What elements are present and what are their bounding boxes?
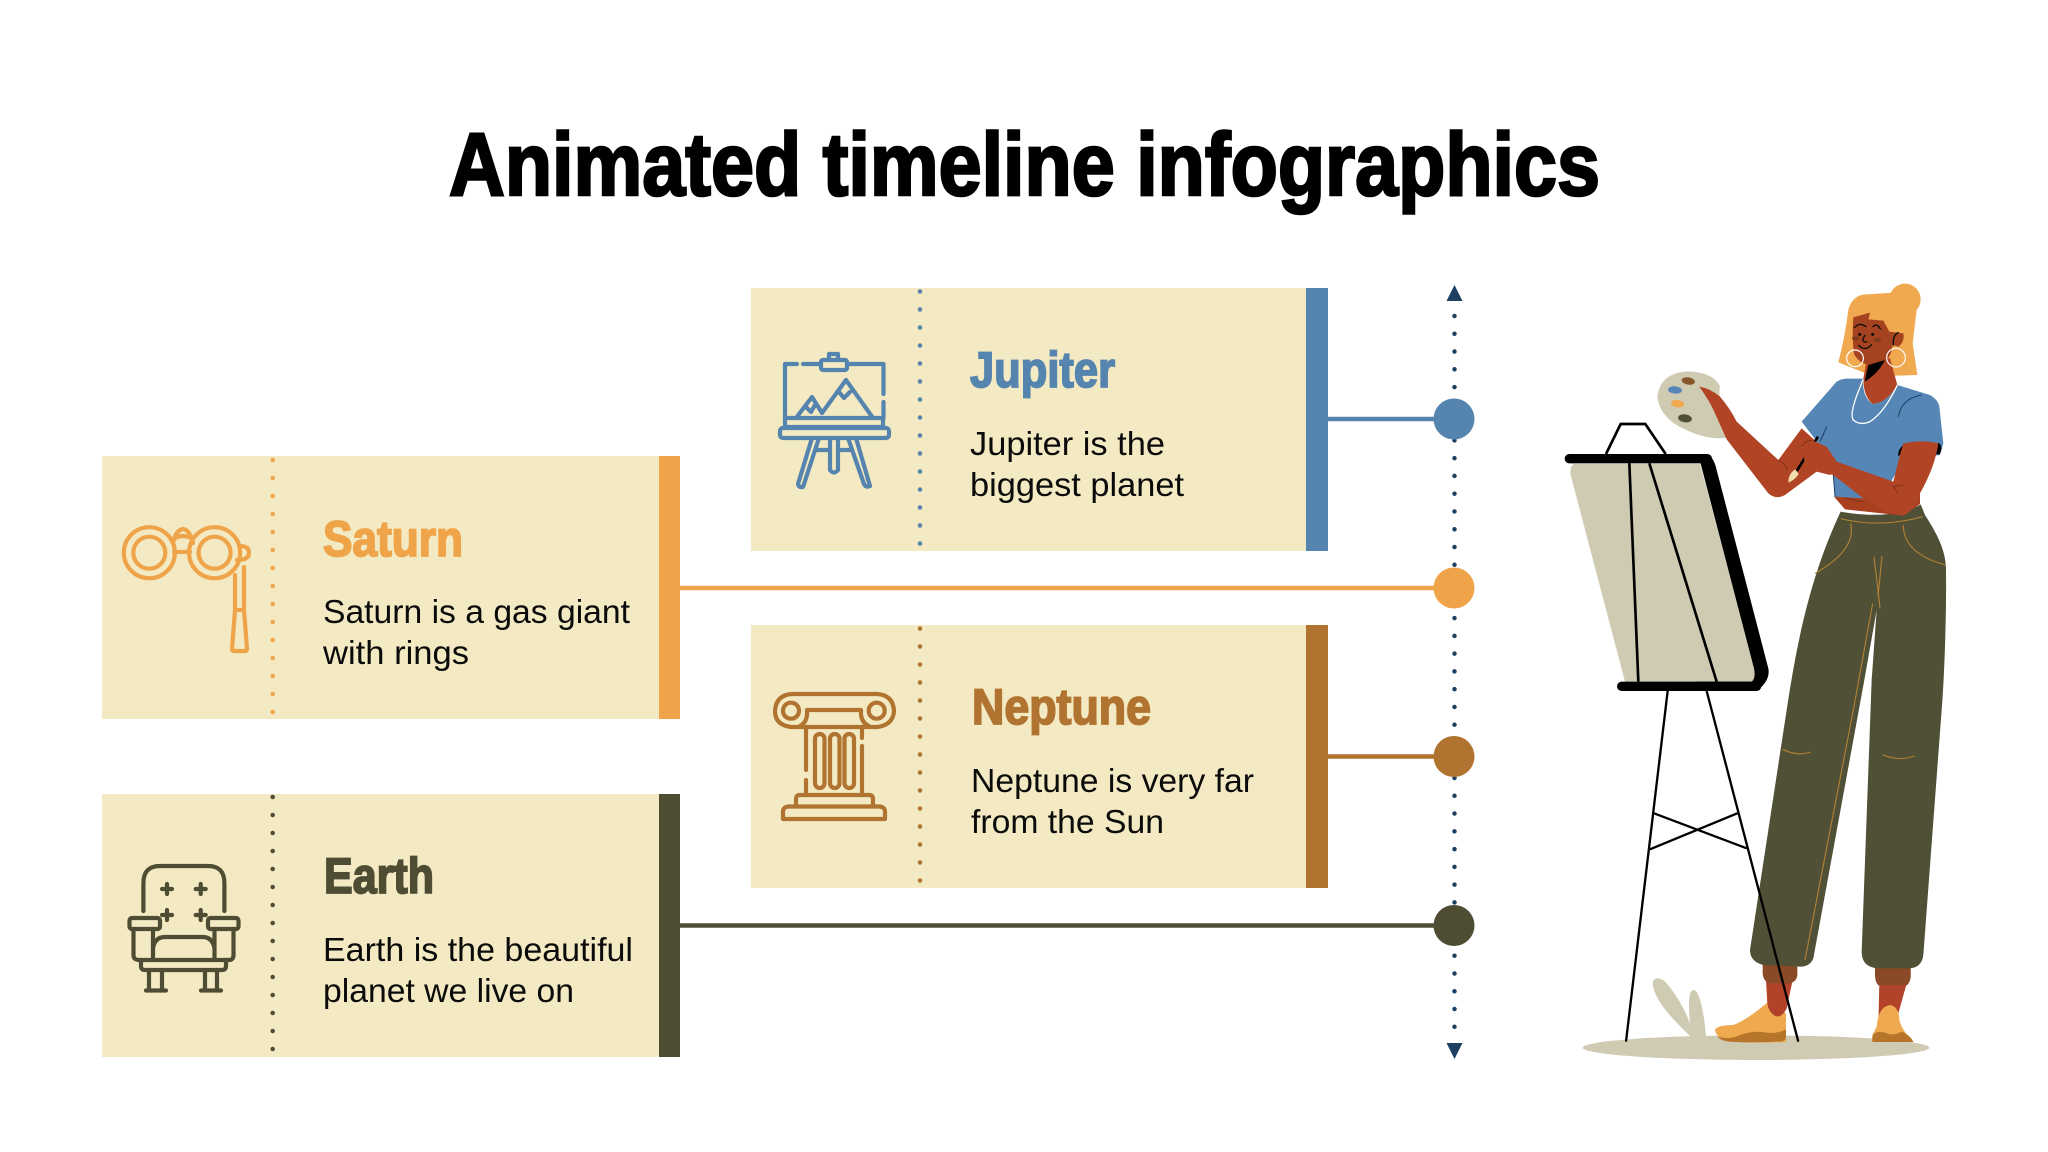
easel top holder: [1606, 424, 1666, 454]
midriff: [1834, 493, 1920, 516]
text: Jupiter description: [970, 426, 1185, 504]
title: Animated timeline infographics: [449, 114, 1600, 214]
connector: Jupiter: [1328, 398, 1474, 440]
connector: Earth: [680, 905, 1474, 946]
panel: Saturn: [102, 456, 680, 719]
arms: [1699, 387, 1938, 516]
hand: [1802, 440, 1837, 475]
trouser seams: [1783, 517, 1945, 960]
text: Earth description: Earth is the beautiful: [323, 932, 633, 969]
text: Saturn description: [322, 594, 631, 672]
text: Earth description: planet we live on: [323, 973, 574, 1010]
easel inner struts: [1629, 463, 1717, 682]
heading: Saturn: Saturn: [323, 511, 463, 567]
icon: opera glasses: [124, 527, 249, 651]
text: Neptune description: from the Sun: [971, 804, 1164, 841]
necklace: [1852, 379, 1897, 423]
left foot: [1715, 965, 1797, 1042]
earrings: [1847, 348, 1905, 367]
icon: armchair: [130, 866, 238, 990]
ground shadow: [1583, 1035, 1929, 1060]
sleeve shadow: [1898, 443, 1941, 456]
easel canvas: [1570, 464, 1755, 682]
palette: [1657, 371, 1736, 438]
face: [1853, 313, 1904, 364]
text: Saturn description: Saturn is a gas giant: [323, 594, 631, 631]
heading: Earth: Earth: [324, 848, 434, 904]
right foot: [1872, 963, 1913, 1042]
easel legs: [1626, 691, 1798, 1042]
brush: [1788, 438, 1817, 483]
heading: Neptune: Neptune: [972, 679, 1151, 735]
icon: column: [775, 694, 894, 819]
text: Jupiter description: biggest planet: [970, 467, 1185, 504]
text: Jupiter description: Jupiter is the: [970, 426, 1165, 463]
panel: Earth: [102, 794, 680, 1057]
timeline axis: [1446, 285, 1462, 1059]
illustration: woman painting at an easel: [1569, 284, 1946, 1060]
icon: easel: [780, 354, 889, 487]
plant: [1653, 978, 1706, 1037]
facial features: [1852, 324, 1898, 349]
connector: Saturn: [680, 568, 1474, 608]
upper body: [1802, 284, 1943, 516]
text: Saturn description: with rings: [322, 635, 469, 672]
text: Earth description: [323, 932, 633, 1010]
neck: [1863, 358, 1897, 404]
connector: Neptune: [1328, 736, 1474, 777]
arm creases: [1778, 441, 1903, 502]
text: Neptune description: Neptune is very far: [971, 763, 1254, 800]
easel frame: [1569, 457, 1769, 691]
heading: Jupiter: Jupiter: [970, 342, 1115, 398]
trousers: [1750, 504, 1946, 968]
text: Neptune description: [971, 763, 1254, 841]
hair: [1838, 284, 1921, 376]
panel: Jupiter: [751, 288, 1328, 551]
panel: Neptune: [751, 625, 1328, 888]
shirt: [1802, 379, 1943, 498]
